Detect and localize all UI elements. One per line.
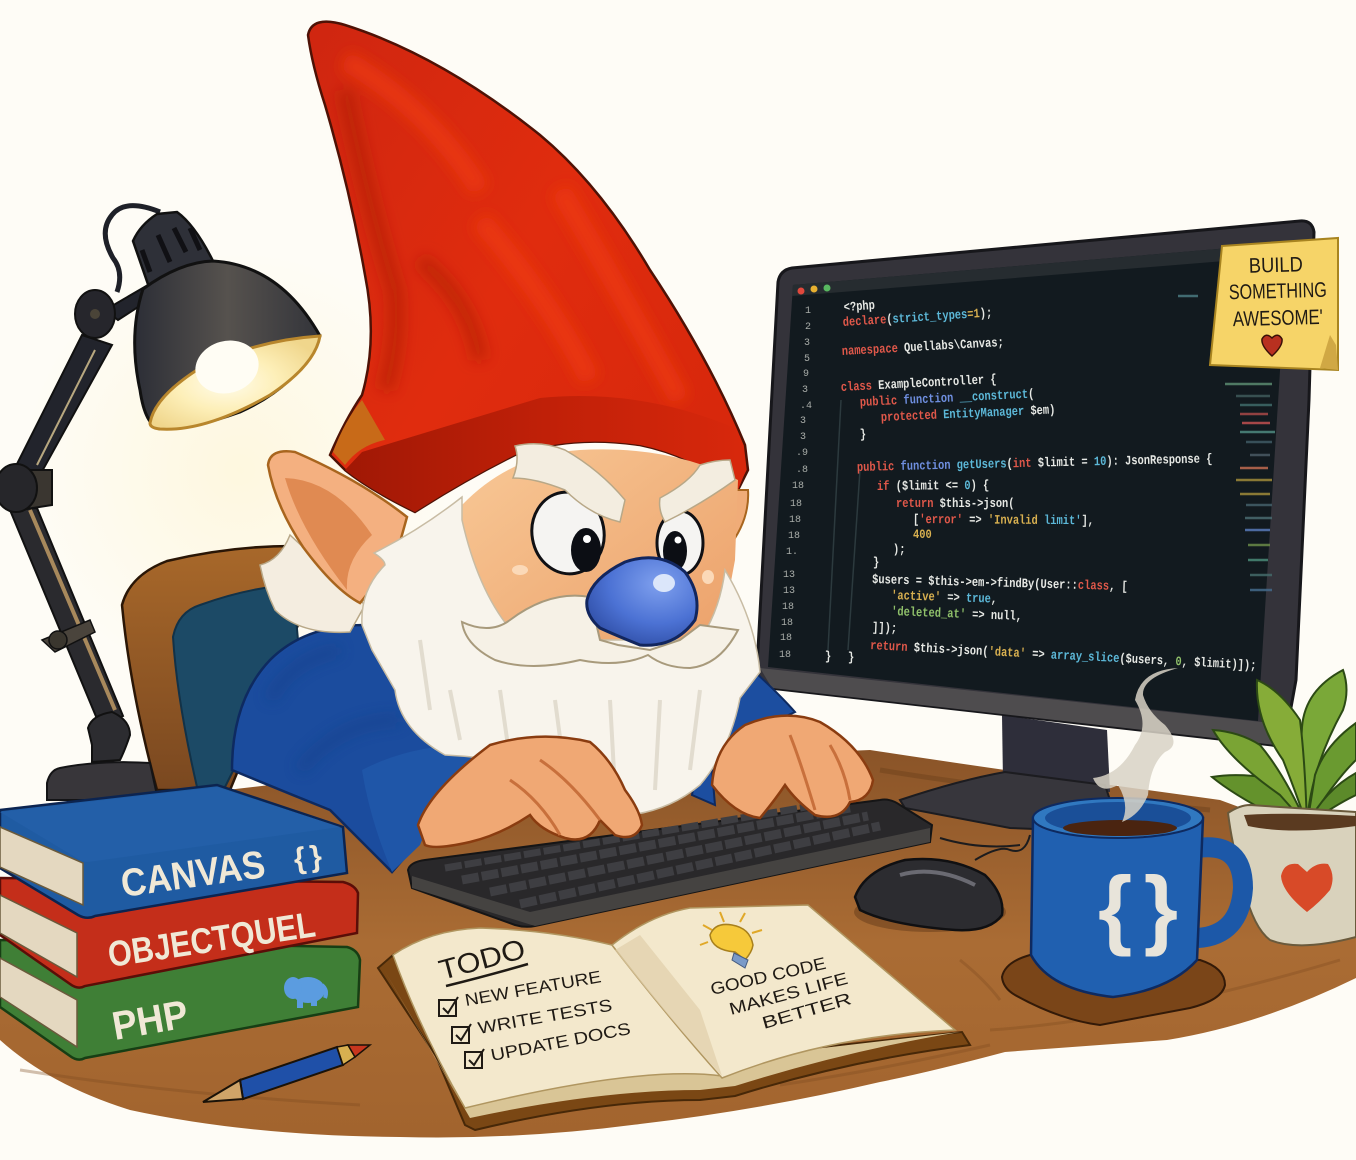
hat shading xyxy=(345,60,680,400)
light bulb icon xyxy=(700,912,762,968)
monitor bezel xyxy=(757,221,1314,746)
code listing: declare(strict_types=1); xyxy=(842,305,993,330)
keys xyxy=(445,803,880,904)
code listing: <?php xyxy=(843,298,875,315)
left page xyxy=(393,928,722,1108)
lamp shade xyxy=(135,261,320,429)
line numbers: 9 xyxy=(803,369,809,380)
pot heart xyxy=(1281,864,1333,912)
left eye xyxy=(525,486,611,580)
code listing: } xyxy=(825,649,831,664)
right page: BETTER xyxy=(760,989,854,1033)
cheek highlights xyxy=(512,565,714,584)
coffee xyxy=(1063,820,1177,836)
notebook cover xyxy=(378,955,970,1130)
sticky note: AWESOME' xyxy=(1233,306,1323,331)
code listing: ]]); xyxy=(872,620,897,636)
coffee steam xyxy=(1093,668,1178,822)
right sleeve xyxy=(692,672,795,805)
gnome head xyxy=(362,444,760,815)
book stack xyxy=(0,785,360,1060)
checklist: WRITE TESTS xyxy=(476,996,614,1038)
code listing: class ExampleController { xyxy=(840,372,997,395)
chair xyxy=(122,546,300,790)
mouse cable xyxy=(940,835,1030,860)
right eyebrow xyxy=(660,460,735,522)
mug handle xyxy=(1198,847,1243,938)
checklist xyxy=(439,967,632,1068)
lamp light xyxy=(150,336,320,429)
window buttons xyxy=(798,284,830,294)
sticky note: BUILD xyxy=(1249,253,1303,278)
line numbers: 13 xyxy=(783,586,795,597)
book: OBJECTQUEL: OBJECTQUEL xyxy=(105,903,318,975)
code listing: 'active' => true, xyxy=(891,588,997,607)
line numbers: .8 xyxy=(796,465,808,476)
monitor stand xyxy=(900,715,1110,830)
monitor screen xyxy=(768,243,1288,721)
lamp neck xyxy=(133,212,213,290)
line numbers: 13 xyxy=(783,570,795,581)
code minimap xyxy=(1178,296,1275,590)
computer mouse xyxy=(854,835,1030,932)
top joint xyxy=(75,285,152,338)
far ear xyxy=(720,490,748,548)
beard xyxy=(362,497,760,815)
line numbers: 18 xyxy=(788,531,800,542)
code listing: ['error' => 'Invalid limit'], xyxy=(913,512,1094,529)
line numbers: 1. xyxy=(786,547,798,558)
book: CANVAS: CANVAS xyxy=(118,843,268,906)
line numbers: 18 xyxy=(779,650,791,661)
book: PHP xyxy=(0,940,360,1060)
coffee mug xyxy=(1002,798,1243,1025)
code listing: protected EntityManager $em) xyxy=(881,402,1056,425)
lamp bulb xyxy=(189,334,265,400)
code listing: $users = $this->em->findBy(User::class, [ xyxy=(872,572,1128,595)
gnome ear xyxy=(268,451,407,603)
line numbers: .4 xyxy=(800,401,812,412)
monitor xyxy=(757,221,1314,830)
coaster xyxy=(1002,955,1225,1025)
code listing: ); xyxy=(893,542,905,557)
right hand xyxy=(712,716,873,818)
line numbers: 3 xyxy=(800,432,806,443)
line numbers: 18 xyxy=(782,602,794,613)
open notebook xyxy=(378,905,970,1130)
plant pot xyxy=(1228,805,1356,945)
code listing: 400 xyxy=(913,527,932,542)
elephant icon xyxy=(284,977,326,1008)
chair cushion xyxy=(173,585,298,787)
checklist: UPDATE DOCS xyxy=(489,1019,632,1065)
checklist: NEW FEATURE xyxy=(463,967,603,1010)
face xyxy=(462,449,738,660)
line numbers: 1 xyxy=(805,306,811,317)
upper lamp arm xyxy=(15,335,112,475)
line numbers: 3 xyxy=(804,338,810,349)
line numbers: 3 xyxy=(802,385,808,396)
code listing: return $this->json( xyxy=(896,496,1015,511)
line numbers: 2 xyxy=(805,322,811,333)
code listing: namespace Quellabs\Canvas; xyxy=(841,335,1004,359)
leaves xyxy=(1212,670,1356,828)
sticky note: SOMETHING xyxy=(1229,279,1327,304)
sticky note xyxy=(1210,238,1338,370)
line numbers: 18 xyxy=(781,618,793,629)
lamp base xyxy=(47,762,158,800)
lower lamp arm xyxy=(10,508,130,762)
sweater body xyxy=(232,625,795,872)
indentation guides xyxy=(828,400,860,650)
code listing: if ($limit <= 0) { xyxy=(877,478,989,494)
hat brim shadow xyxy=(345,396,746,512)
code listing: public function getUsers(int $limit = 10): JsonResponse { xyxy=(857,451,1213,475)
code listing: } xyxy=(873,555,879,570)
pointed red hat xyxy=(308,22,748,512)
code listing: } xyxy=(860,427,866,442)
code listing: } xyxy=(848,650,854,665)
keyboard xyxy=(408,800,932,927)
desk lamp xyxy=(0,206,320,800)
mug body xyxy=(1031,818,1203,997)
line numbers: 18 xyxy=(792,481,804,492)
book: CANVAS xyxy=(0,785,347,918)
elbow joint xyxy=(0,464,52,512)
right page: GOOD CODE xyxy=(709,954,828,999)
left page: TODO xyxy=(436,933,529,986)
code listing: public function __construct( xyxy=(859,386,1035,410)
line numbers: 18 xyxy=(780,633,792,644)
right eye xyxy=(657,511,703,575)
line numbers: .9 xyxy=(796,448,808,459)
line numbers: 18 xyxy=(789,515,801,526)
mug rim xyxy=(1033,798,1203,838)
mustache xyxy=(462,596,738,668)
line numbers: 5 xyxy=(804,354,810,365)
wooden desk xyxy=(0,750,1356,1137)
code listing xyxy=(825,298,1257,674)
sticky heart xyxy=(1262,335,1282,356)
hair behind ear xyxy=(260,535,365,632)
plant xyxy=(1212,670,1356,945)
lamp glow xyxy=(20,250,460,690)
lamp wire xyxy=(105,206,160,292)
right page: MAKES LIFE xyxy=(727,969,850,1019)
book: PHP: PHP xyxy=(109,992,191,1049)
code listing: 'deleted_at' => null, xyxy=(891,604,1022,624)
line numbers xyxy=(779,306,812,661)
book: CANVAS: { } xyxy=(292,840,324,876)
code listing: return $this->json('data' => array_slice($users, 0, $limit)]); xyxy=(870,638,1257,674)
book: OBJECTQUEL xyxy=(0,878,358,988)
line numbers: 3 xyxy=(800,416,806,427)
mug braces: { } xyxy=(1098,858,1178,957)
left eyebrow xyxy=(513,444,625,522)
right page xyxy=(612,905,955,1078)
pencil xyxy=(203,1045,370,1102)
blue nose xyxy=(587,558,697,645)
left hand xyxy=(418,737,642,847)
line numbers: 18 xyxy=(790,499,802,510)
